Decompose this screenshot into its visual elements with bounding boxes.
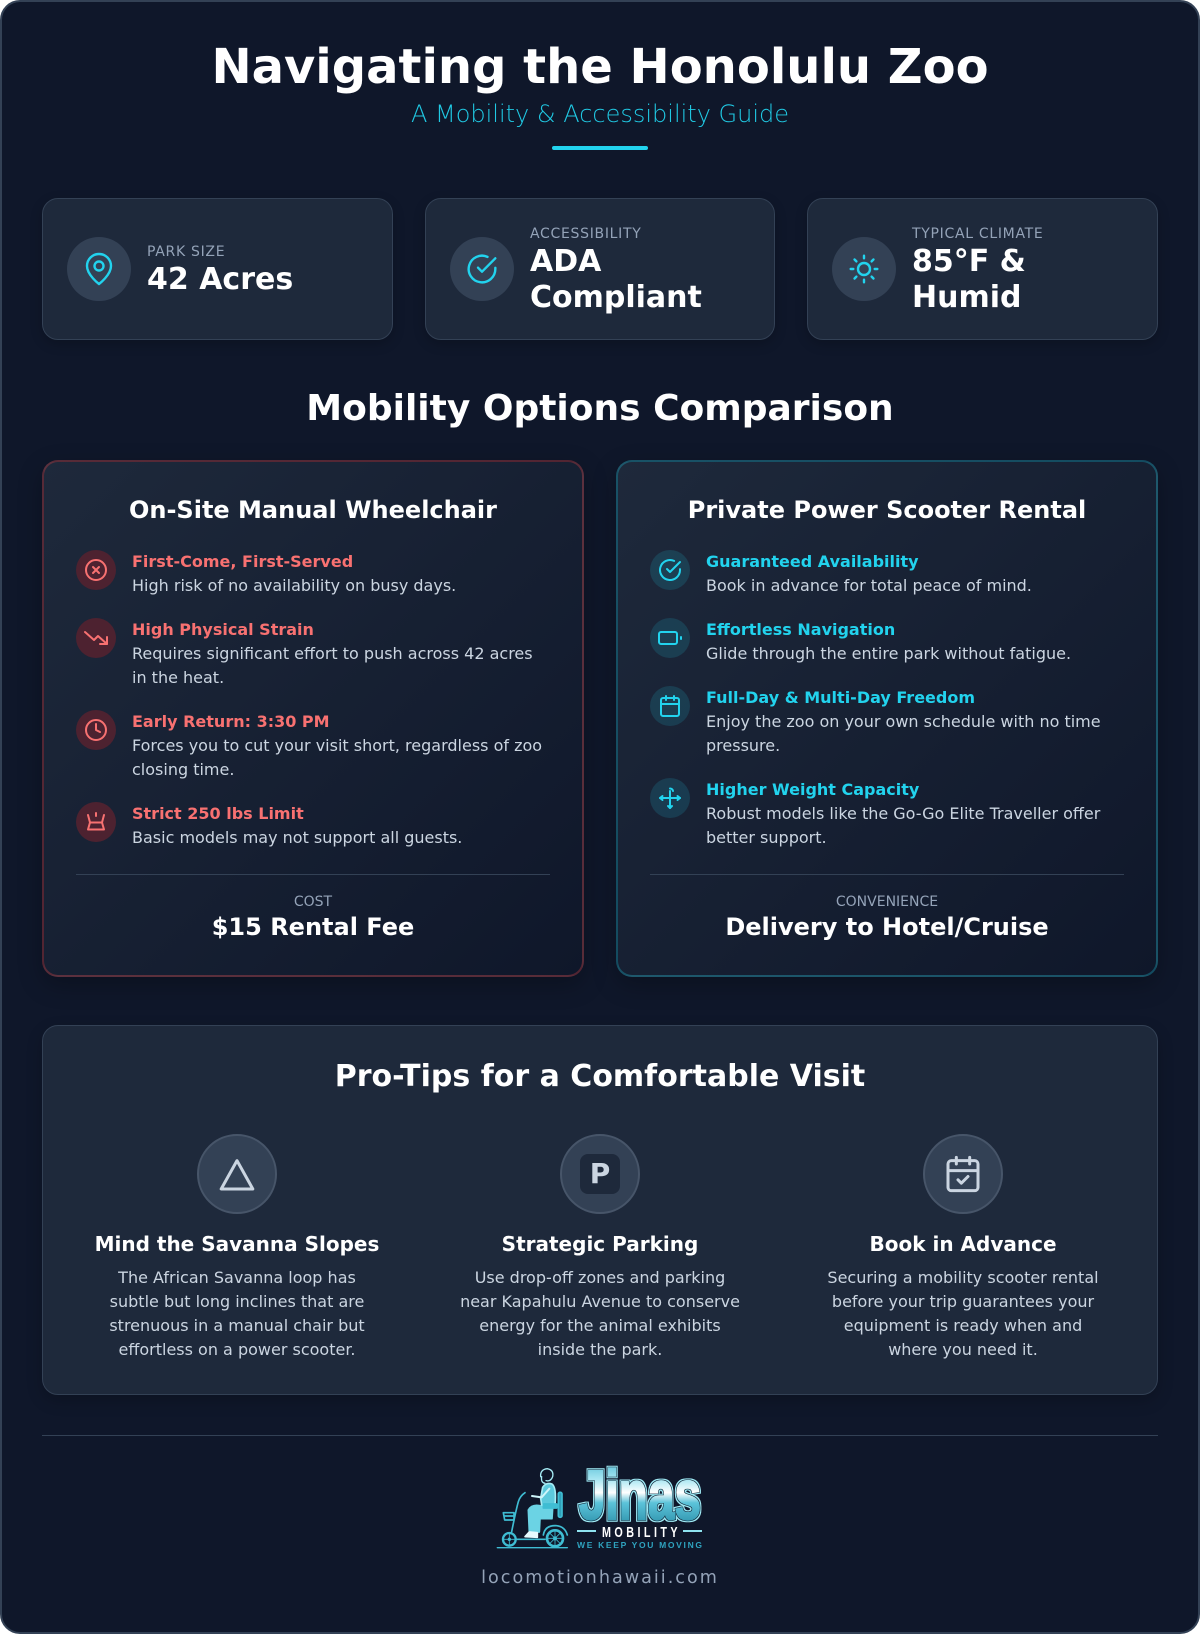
item: full-day freedom: Enjoy the zoo on your own schedule with no time pressure. bbox=[706, 712, 1101, 755]
tip text: strenuous in a manual chair but bbox=[109, 1316, 365, 1335]
convenience value: Delivery to Hotel/Cruise bbox=[725, 913, 1049, 941]
panel: private power scooter rental bbox=[616, 460, 1158, 977]
logo tagline: WE KEEP YOU MOVING bbox=[577, 1540, 702, 1550]
item: early return bbox=[76, 710, 542, 779]
stat card: park size bbox=[42, 198, 393, 340]
value: 85F and humid: 85°F & bbox=[912, 244, 1026, 279]
tip text: The African Savanna loop has bbox=[118, 1268, 356, 1287]
logo word: mobility: MOBILITY bbox=[602, 1523, 678, 1540]
icon: weight bbox=[76, 802, 116, 842]
item: weight capacity: Higher Weight Capacity bbox=[706, 780, 919, 799]
item: early return: Forces you to cut your visit short, regardless of zoo closing time. bbox=[132, 736, 542, 779]
cost value: $15 Rental Fee bbox=[212, 913, 414, 941]
stat card: accessibility bbox=[425, 198, 775, 340]
item: full-day freedom bbox=[650, 686, 1101, 755]
subtitle: A Mobility & Accessibility Guide bbox=[411, 100, 789, 128]
item: guaranteed availability: Guaranteed Availability bbox=[706, 552, 919, 571]
tip text bbox=[460, 1268, 740, 1359]
item: effortless navigation: Effortless Navigation bbox=[706, 620, 895, 639]
label: accessibility: ACCESSIBILITY bbox=[530, 226, 642, 242]
icon: trending down bbox=[76, 618, 116, 658]
item: weight limit: Strict 250 lbs Limit bbox=[132, 804, 304, 823]
item: weight capacity bbox=[650, 778, 1100, 847]
tip text: inside the park. bbox=[538, 1340, 662, 1359]
icon: parking: P bbox=[590, 1157, 610, 1190]
icon: check circle bbox=[650, 550, 690, 590]
tip title: Strategic Parking bbox=[502, 1232, 698, 1256]
panel: on-site manual wheelchair bbox=[42, 460, 584, 977]
tip text: Use drop-off zones and parking bbox=[475, 1268, 725, 1287]
panel: pro-tips bbox=[42, 1025, 1158, 1395]
icon: move arrows bbox=[650, 778, 690, 818]
item: physical strain: High Physical Strain bbox=[132, 620, 314, 639]
tip text: Securing a mobility scooter rental bbox=[827, 1268, 1099, 1287]
tip text: before your trip guarantees your bbox=[832, 1292, 1094, 1311]
item: effortless navigation bbox=[650, 618, 1071, 663]
icon: triangle bbox=[197, 1134, 277, 1214]
panel title: On-Site Manual Wheelchair bbox=[129, 496, 497, 524]
value: ADA compliant: Compliant bbox=[530, 280, 702, 315]
logo: Jinas Mobility bbox=[496, 1460, 702, 1550]
value: 85F and humid: Humid bbox=[912, 280, 1021, 315]
item: full-day freedom: Full-Day & Multi-Day Freedom bbox=[706, 688, 975, 707]
item: effortless navigation: Glide through the entire park without fatigue. bbox=[706, 644, 1071, 663]
icon: calendar check bbox=[923, 1134, 1003, 1214]
value: 85F and humid bbox=[912, 244, 1026, 315]
item: guaranteed availability bbox=[650, 550, 1032, 595]
tip: savanna slopes bbox=[95, 1134, 379, 1359]
tip text: effortless on a power scooter. bbox=[118, 1340, 356, 1359]
tip text: where you need it. bbox=[888, 1340, 1038, 1359]
stat card: typical climate bbox=[807, 198, 1158, 340]
tip text bbox=[827, 1268, 1099, 1359]
website url: locomotionhawaii.com bbox=[481, 1568, 719, 1588]
tip title: Book in Advance bbox=[869, 1232, 1057, 1256]
value: ADA compliant: ADA bbox=[530, 244, 601, 279]
tip: strategic parking bbox=[460, 1134, 740, 1359]
item: first-come: First-Come, First-Served bbox=[132, 552, 353, 571]
icon: sun bbox=[832, 237, 896, 301]
label: typical climate: TYPICAL CLIMATE bbox=[912, 226, 1043, 242]
scooter rider bbox=[497, 1469, 567, 1548]
item: weight limit: Basic models may not support all guests. bbox=[132, 828, 462, 847]
icon: parking bbox=[560, 1134, 640, 1214]
panel title: Private Power Scooter Rental bbox=[688, 496, 1086, 524]
title underline bbox=[552, 146, 648, 150]
item: first-come: High risk of no availability on busy days. bbox=[132, 576, 456, 595]
tip title: Mind the Savanna Slopes bbox=[95, 1232, 379, 1256]
pro-tips heading: Pro-Tips for a Comfortable Visit bbox=[335, 1059, 865, 1094]
cost label: COST bbox=[294, 894, 332, 910]
item: physical strain bbox=[76, 618, 533, 687]
icon: calendar bbox=[650, 686, 690, 726]
value: ADA compliant bbox=[530, 244, 702, 315]
tip text: energy for the animal exhibits bbox=[479, 1316, 721, 1335]
convenience label: CONVENIENCE bbox=[836, 894, 938, 910]
item: guaranteed availability: Book in advance for total peace of mind. bbox=[706, 576, 1032, 595]
tip text: near Kapahulu Avenue to conserve bbox=[460, 1292, 740, 1311]
icon: x circle bbox=[76, 550, 116, 590]
item: first-come bbox=[76, 550, 456, 595]
icon: map pin bbox=[67, 237, 131, 301]
heading: mobility options comparison: Mobility Options Comparison bbox=[306, 388, 894, 429]
label: park size: PARK SIZE bbox=[147, 244, 225, 260]
icon: clock bbox=[76, 710, 116, 750]
icon: check circle bbox=[450, 237, 514, 301]
tip: book in advance bbox=[827, 1134, 1099, 1359]
item: weight limit bbox=[76, 802, 462, 847]
item: physical strain: Requires significant effort to push across 42 acres in the heat. bbox=[132, 644, 533, 687]
value: 42 acres: 42 Acres bbox=[147, 262, 293, 297]
tip text: equipment is ready when and bbox=[844, 1316, 1082, 1335]
icon: battery bbox=[650, 618, 690, 658]
tip text bbox=[109, 1268, 365, 1359]
item: early return: Early Return: 3:30 PM bbox=[132, 712, 330, 731]
item: weight capacity: Robust models like the Go-Go Elite Traveller offer better support. bbox=[706, 804, 1100, 847]
title: Navigating the Honolulu Zoo bbox=[211, 39, 989, 95]
tip text: subtle but long inclines that are bbox=[110, 1292, 364, 1311]
